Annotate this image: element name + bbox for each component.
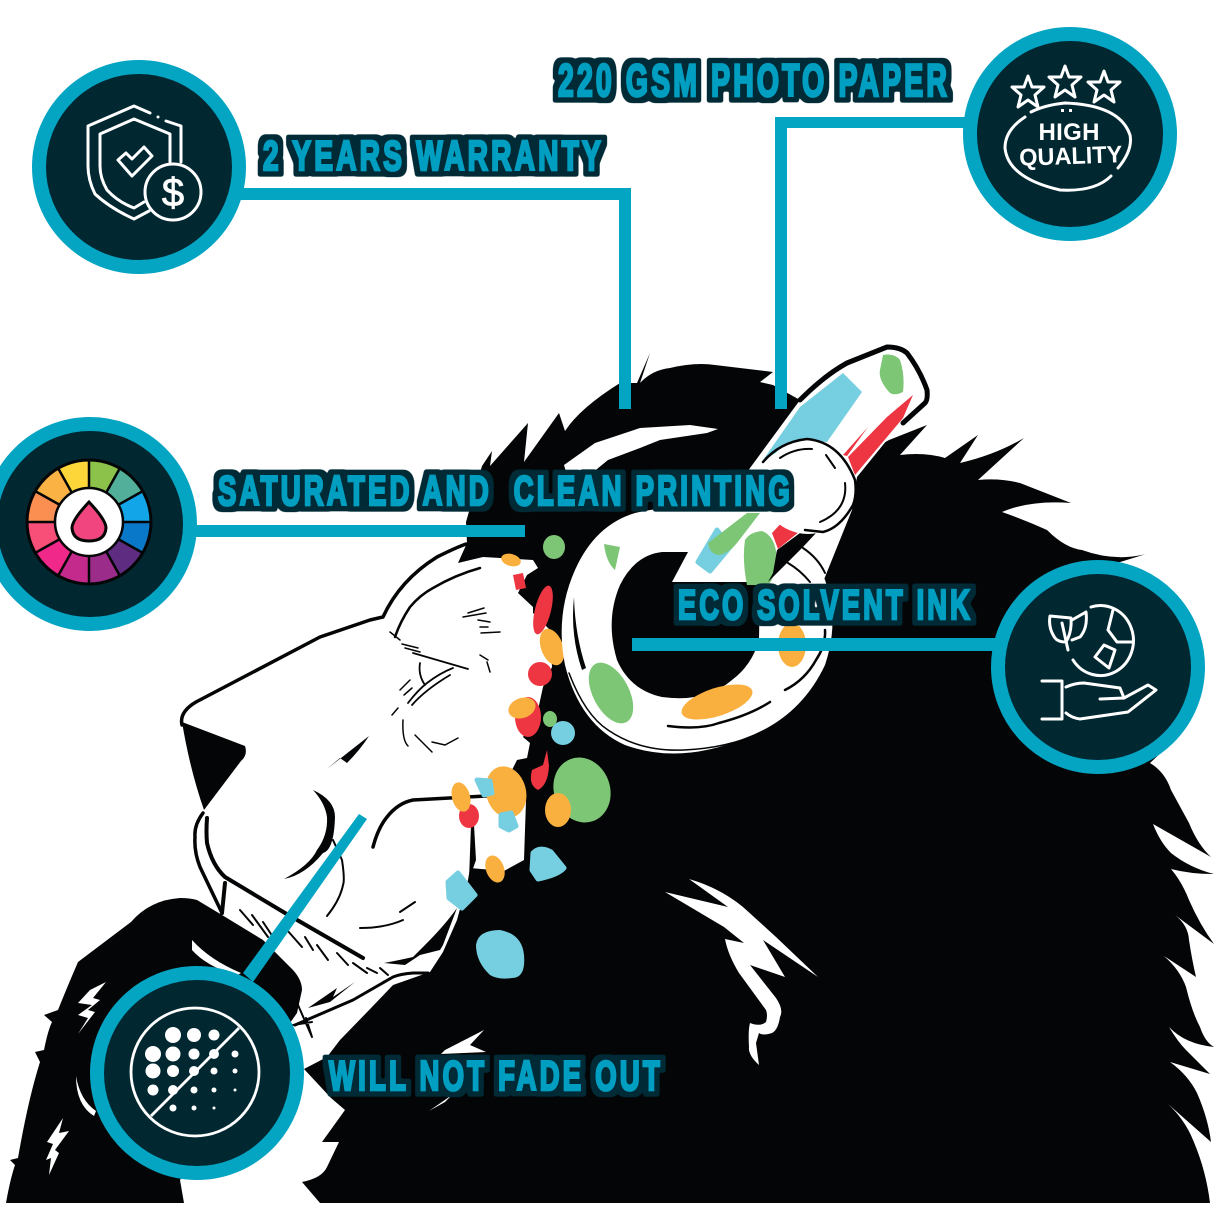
- feature: high quality badge: [970, 34, 1170, 234]
- lion nose: [182, 722, 246, 810]
- icon: stars and oval: HIGH: [1038, 119, 1100, 146]
- feature: warranty badge: [39, 67, 239, 267]
- paint splatter blobs: [448, 535, 620, 979]
- feature: eco solvent ink badge: [998, 567, 1198, 767]
- label: 2 years warranty: 2 YEARS WARRANTY: [263, 132, 604, 179]
- icon: shield with dollar coin: $: [162, 171, 184, 215]
- icon: shield with dollar coin: [88, 106, 201, 220]
- icon: colour wheel with ink drop: [24, 457, 154, 587]
- connector lines: [185, 117, 997, 982]
- lion paw: [6, 898, 302, 1203]
- lion mane: [302, 353, 1214, 1203]
- label: will not fade out: WILL NOT FADE OUT: [329, 1052, 663, 1099]
- feature: will not fade out badge: [97, 973, 297, 1173]
- lion illustration: [6, 347, 1214, 1203]
- icon: globe and leaf in hand: [1042, 606, 1156, 719]
- label: saturated and clean printing: SATURATED AND CLEAN PRINTING: [218, 467, 793, 514]
- white fur flashes: [46, 425, 818, 1175]
- icon: crossed halftone dots: [131, 1008, 259, 1136]
- headphone ear cup: [562, 507, 832, 754]
- label: eco solvent ink: ECO SOLVENT INK: [678, 581, 973, 628]
- ear cup hinge: [761, 439, 856, 534]
- feature: colour printing badge: [0, 424, 190, 624]
- headphone band: [675, 347, 927, 585]
- icon: stars and oval: QUALITY: [1019, 141, 1123, 172]
- label: 220 gsm photo paper: 220 GSM PHOTO PAPER: [558, 55, 950, 106]
- icon: stars and oval: [1005, 66, 1130, 190]
- face line art: [182, 544, 500, 1037]
